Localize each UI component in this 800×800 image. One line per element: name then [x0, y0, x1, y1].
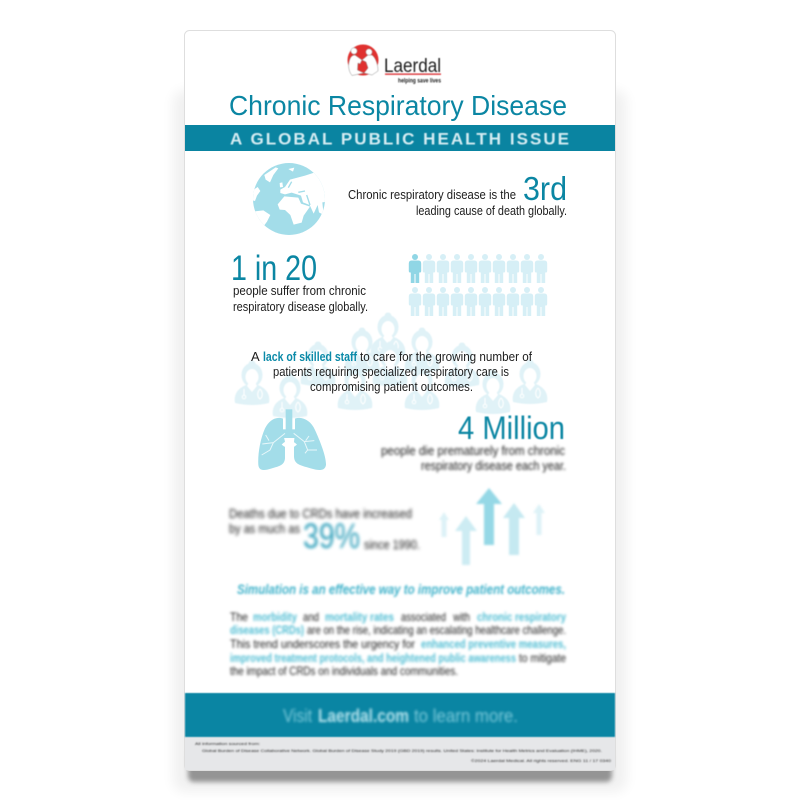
stat text line 1: Chronic respiratory disease is the [348, 187, 516, 202]
call to action: Laerdal.com [318, 706, 409, 726]
card shadow [173, 90, 627, 792]
stat description: respiratory disease each year. [421, 458, 566, 473]
arrow 2 [455, 516, 477, 565]
text: lack of skilled staff: compromising patient outcomes. [310, 379, 473, 394]
text: lack of skilled staff: A [251, 349, 260, 364]
body paragraph: are on the rise, indicating an escalating healthcare challenge. [307, 623, 566, 637]
stat text line 2: leading cause of death globally. [416, 203, 567, 218]
stat description [233, 283, 368, 314]
references and copyright: ©2024 Laerdal Medical. All rights reserved. ENG 11 / 17 0340 [471, 759, 611, 763]
stat description: by as much as [229, 521, 300, 536]
call to action: Visit [283, 706, 312, 726]
icon: rising arrows [439, 488, 545, 565]
body paragraph [230, 610, 566, 678]
body paragraph: associated with [401, 610, 470, 624]
body paragraph: diseases (CRDs) [230, 623, 304, 637]
pictogram: 1 in 20 people [409, 254, 547, 316]
footer band [185, 693, 615, 737]
logo emblem [348, 44, 378, 76]
body paragraph: the impact of CRDs on individuals and communities. [230, 664, 458, 678]
body paragraph: enhanced preventive measures, [421, 637, 566, 651]
arrow 5 [533, 504, 545, 535]
body paragraph: chronic respiratory [477, 610, 566, 624]
text: lack of skilled staff [251, 349, 532, 394]
stat description [381, 443, 566, 473]
background illustration: nursing staff [235, 312, 547, 418]
references and copyright [195, 742, 611, 763]
stat figure: 1 in 20: 1 in 20 [231, 249, 317, 288]
arrow 1 [439, 512, 449, 537]
logo tagline: helping save lives [398, 78, 442, 84]
references and copyright: All information sourced from: [195, 742, 260, 746]
highlighted phrase: lack of skilled staff [263, 349, 358, 364]
stat description [229, 506, 420, 552]
stat description: Deaths due to CRDs have increased [229, 506, 412, 521]
stat figure: 39%: 39% [303, 517, 360, 556]
stat description: respiratory disease globally. [233, 299, 368, 314]
body paragraph: and [303, 610, 319, 624]
stat: third leading cause of death [348, 170, 567, 218]
arrow 3 [476, 488, 502, 545]
callout: simulation: Simulation is an effective way to improve patient outcomes. [237, 581, 565, 597]
stat figure: 4 Million: 4 Million [458, 410, 565, 446]
stat: 1 in 20 [231, 249, 368, 314]
body paragraph: improved treatment protocols, and heightened public awareness [230, 651, 516, 665]
stat description: people suffer from chronic [233, 283, 366, 298]
arrow 4 [503, 503, 525, 555]
text: lack of skilled staff: to care for the growing number of [360, 349, 532, 364]
references and copyright: Global Burden of Disease Collaborative Network. Global Burden of Disease Study 2019 (GBD 2019) results. United States: Institute for Health Metrics and Evaluation (IHME), 2020. [202, 749, 602, 753]
stat: 4 Million [381, 410, 566, 473]
body paragraph: to mitigate [519, 651, 566, 665]
stat figure: 3rd: 3rd [523, 170, 567, 207]
body paragraph: mortality rates [325, 610, 394, 624]
body paragraph: morbidity [253, 610, 297, 624]
title: Chronic Respiratory Disease [229, 90, 567, 121]
subtitle band [185, 125, 615, 151]
stat description: since 1990. [364, 537, 420, 552]
subtitle text: A GLOBAL PUBLIC HEALTH ISSUE [230, 130, 569, 148]
logo wordmark: Laerdal [384, 56, 441, 77]
icon: lungs [258, 409, 326, 470]
poster card [184, 30, 616, 770]
logo: Laerdal [348, 44, 442, 84]
logo underline [385, 74, 441, 75]
icon: globe [250, 163, 328, 235]
call to action: to learn more. [414, 706, 518, 726]
body paragraph: The [230, 610, 248, 624]
highlighted person [409, 254, 421, 283]
call to action [283, 706, 518, 726]
infographic poster [174, 30, 626, 790]
body paragraph: This trend underscores the urgency for [230, 637, 415, 651]
text: lack of skilled staff: patients requiring specialized respiratory care is [273, 364, 509, 379]
stat: 39% increase [229, 506, 420, 556]
stat description: people die prematurely from chronic [381, 443, 565, 458]
